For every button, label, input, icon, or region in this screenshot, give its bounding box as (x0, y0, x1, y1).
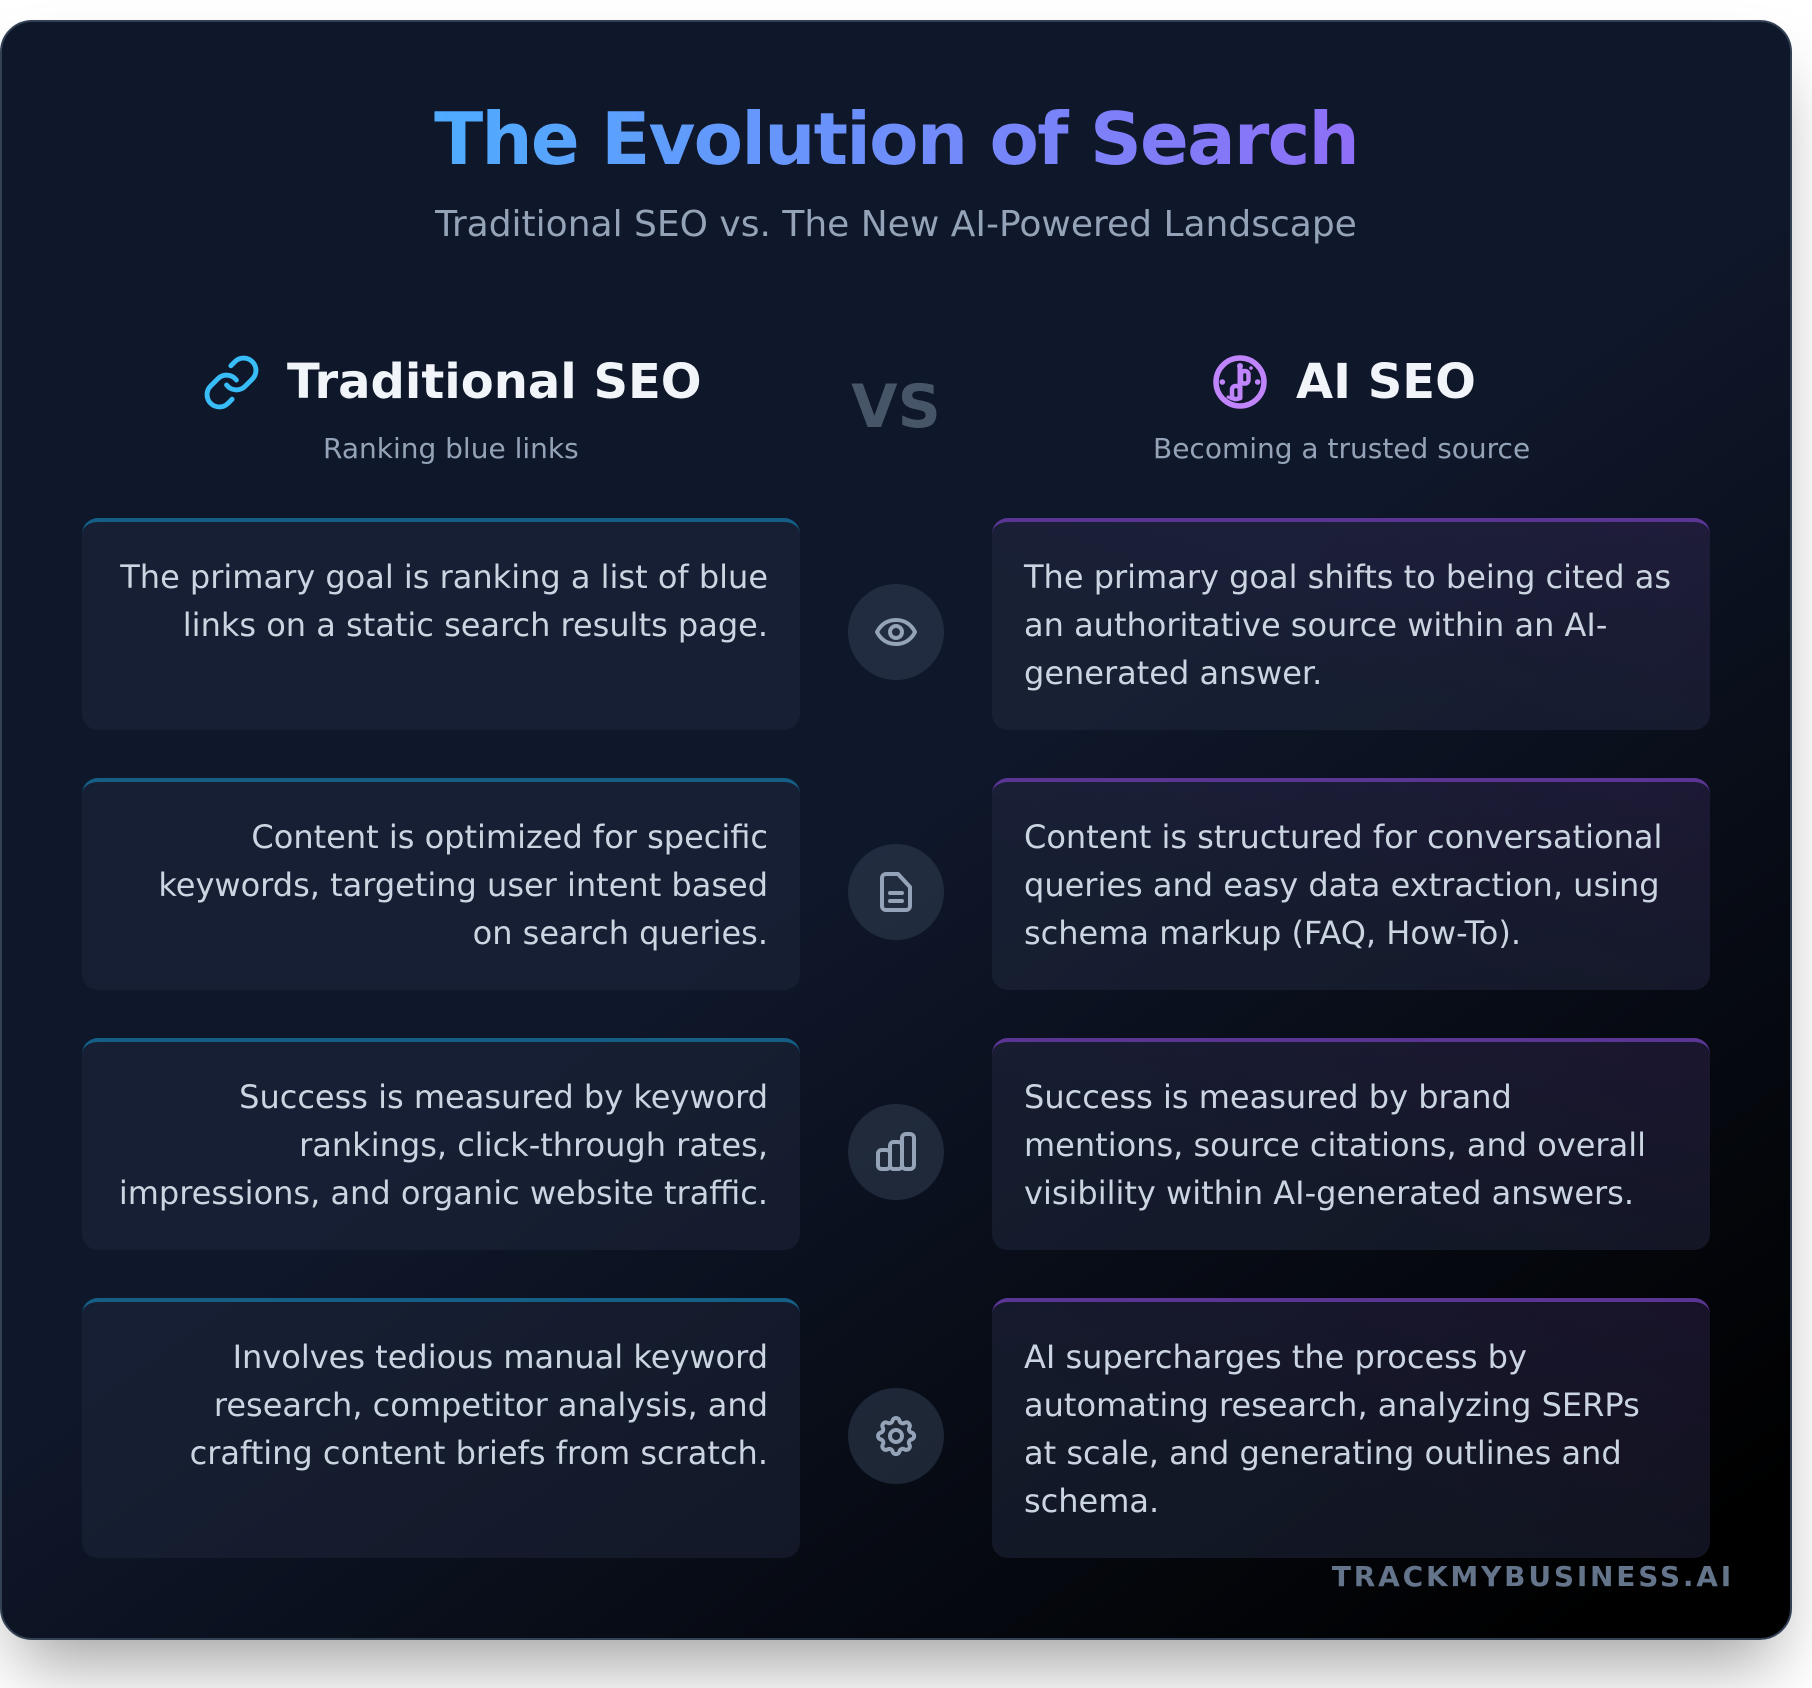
card: traditional goal: links on a static search results page. (183, 606, 768, 644)
icon: eye (848, 584, 944, 680)
card: AI metrics: visibility within AI-generated answers. (1024, 1174, 1634, 1212)
card: traditional content (82, 778, 800, 990)
icon: gear (848, 1388, 944, 1484)
card: AI goal: generated answer. (1024, 654, 1322, 692)
icon: link (204, 356, 258, 410)
card: traditional content: keywords, targeting user intent based (158, 866, 768, 904)
card: traditional metrics: rankings, click-through rates, (299, 1126, 768, 1164)
subtitle: Traditional SEO vs. The New AI-Powered Landscape (435, 204, 1357, 245)
card: AI process: AI supercharges the process by (1024, 1338, 1527, 1376)
VS label: VS (851, 372, 941, 442)
icon: bar chart (848, 1104, 944, 1200)
card: traditional metrics: Success is measured by keyword (239, 1078, 768, 1116)
card: traditional process: Involves tedious manual keyword (233, 1338, 768, 1376)
card: AI process: automating research, analyzing SERPs (1024, 1386, 1640, 1424)
heading: Traditional SEO: Traditional SEO (287, 354, 702, 410)
card: AI metrics (992, 1038, 1710, 1250)
card: AI content: schema markup (FAQ, How-To). (1024, 914, 1521, 952)
card: AI goal: The primary goal shifts to being cited as (1024, 558, 1671, 596)
card: traditional content: Content is optimized for specific (251, 818, 768, 856)
card: AI process (992, 1298, 1710, 1558)
card: traditional goal: The primary goal is ranking a list of blue (120, 558, 768, 596)
card: AI goal (992, 518, 1710, 730)
card: AI content (992, 778, 1710, 990)
watermark: TRACKMYBUSINESS.AI (1332, 1560, 1734, 1593)
icon: document (848, 844, 944, 940)
card: traditional process (82, 1298, 800, 1558)
card: traditional process: research, competitor analysis, and (214, 1386, 768, 1424)
card: traditional metrics: impressions, and organic website traffic. (119, 1174, 768, 1212)
card: AI content: Content is structured for conversational (1024, 818, 1662, 856)
caption: Becoming a trusted source: Becoming a trusted source (1153, 432, 1530, 465)
card: AI goal: an authoritative source within an AI- (1024, 606, 1607, 644)
card: AI metrics: Success is measured by brand (1024, 1078, 1512, 1116)
caption: Ranking blue links: Ranking blue links (323, 432, 579, 465)
card: traditional content: on search queries. (473, 914, 768, 952)
card: AI process: schema. (1024, 1482, 1159, 1520)
card: traditional metrics (82, 1038, 800, 1250)
card: traditional goal (82, 518, 800, 730)
card: AI process: at scale, and generating outlines and (1024, 1434, 1622, 1472)
card: AI metrics: mentions, source citations, and overall (1024, 1126, 1646, 1164)
title: The Evolution of Search (434, 97, 1358, 181)
card: AI content: queries and easy data extraction, using (1024, 866, 1660, 904)
icon: AI orbit (1213, 355, 1267, 409)
heading: AI SEO: AI SEO (1296, 354, 1476, 410)
card: traditional process: crafting content briefs from scratch. (190, 1434, 768, 1472)
